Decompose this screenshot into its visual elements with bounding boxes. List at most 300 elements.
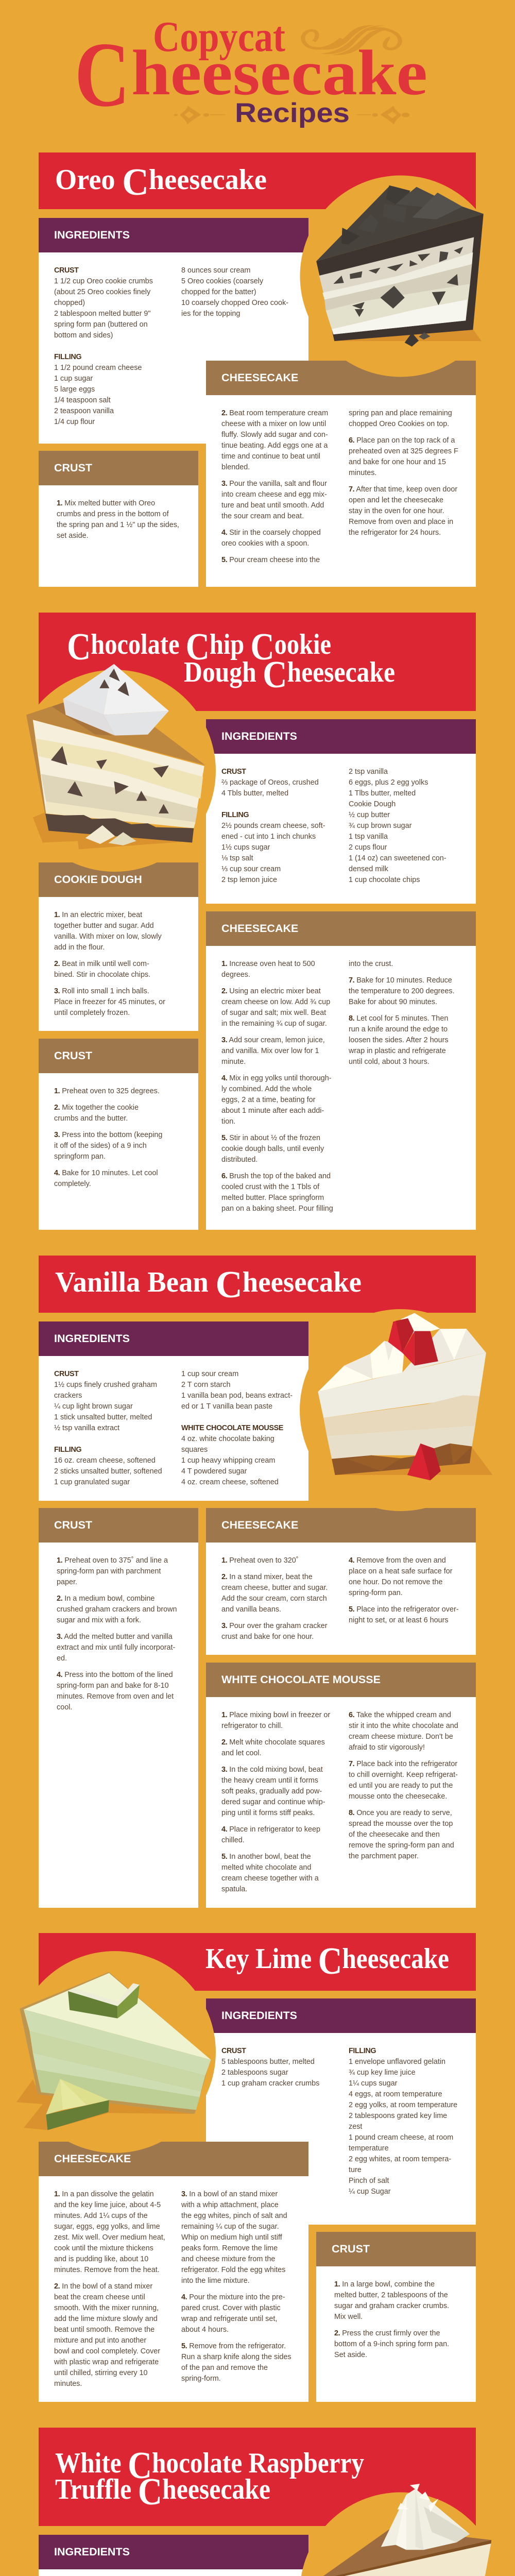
heading: INGREDIENTS (221, 2009, 297, 2022)
steps column 1: of sugar and salt; mix well. Beat (221, 1009, 326, 1017)
steps column 2 (349, 1555, 459, 1626)
steps column 2: Bake for about 90 minutes. (349, 998, 437, 1006)
ornament: right flourish (356, 106, 409, 125)
ingredients column 1: 2 teaspoon vanilla (54, 407, 114, 415)
ingredients column 2: ¼ cup Sugar (349, 2188, 391, 2196)
banner: White Chocolate Raspberry Truffle Cheesecake: Truffle (55, 2473, 141, 2505)
panel: ingredients (206, 719, 476, 904)
ingredients column 2: densed milk (349, 865, 388, 873)
steps column 1: into cream cheese and egg mix- (221, 490, 327, 499)
steps column 2: 6. Take the whipped cream and (349, 1711, 451, 1719)
cake slice (26, 664, 205, 849)
steps column 1: add the lime mixture slowly and (54, 2315, 158, 2323)
ingredients column 2: 4 T powdered sugar (181, 1467, 247, 1476)
ingredients column 1 (54, 1368, 162, 1488)
steps column 2: 3. In a bowl of an stand mixer (181, 2190, 278, 2198)
panel: crust (39, 1508, 198, 1908)
steps column 2 (349, 1710, 458, 1862)
ingredients column 1: FILLING (54, 1446, 81, 1454)
section: Key Lime Cheesecake (0, 1933, 515, 2402)
steps: crumbs and the butter. (54, 1114, 128, 1122)
steps column 1: time and continue to beat until (221, 452, 320, 461)
steps column 1: Add the sour cream, corn starch (221, 1595, 327, 1603)
illustration: oreo cheesecake slice (300, 176, 501, 378)
banner: Vanilla Bean Cheesecake (39, 1256, 476, 1313)
ingredients column 1: 2 tablespoon melted butter 9" (54, 310, 151, 318)
ingredients column 1: 1 cup graham cracker crumbs (221, 2079, 319, 2088)
steps column 2: wrap and refrigerate until set, (181, 2315, 277, 2323)
ingredients column 1: 1½ cups sugar (221, 843, 270, 852)
steps column 1: sugar, eggs, egg yolks, and lime (54, 2223, 160, 2231)
ingredients column 2: 1 vanilla bean pod, beans extract- (181, 1391, 293, 1399)
heading (206, 1663, 476, 1697)
backdrop circle (14, 670, 216, 872)
steps column 1: 4. Stir in the coarsely chopped (221, 529, 321, 537)
steps column 1 (221, 1710, 330, 1895)
heading: CRUST (54, 1519, 92, 1531)
steps column 1 (221, 408, 328, 566)
banner: Chocolate Chip Cookie Dough Cheesecake: C (263, 654, 287, 696)
cake slice (16, 1972, 211, 2130)
steps: 2. Beat in milk until well com- (54, 960, 149, 968)
steps column 2: loosen the sides. After 2 hours (349, 1036, 449, 1044)
steps column 1: 2. In a stand mixer, beat the (221, 1573, 313, 1581)
heading: Copycat: Copycat (153, 13, 285, 61)
steps: cool. (57, 1703, 72, 1711)
heading: Cheesecake: heesecake (131, 38, 427, 109)
ingredients column 2: temperature (349, 2144, 389, 2153)
steps column 2: of the pan and remove the (181, 2364, 268, 2372)
banner: Chocolate Chip Cookie Dough Cheesecake: C (186, 626, 210, 668)
steps column 1: melted white chocolate and (221, 1863, 311, 1872)
steps: 3. Roll into small 1 inch balls. (54, 987, 149, 995)
ingredients column 1: 2 tablespoons sugar (221, 2069, 288, 2077)
steps: spring-form pan with parchment (57, 1567, 161, 1575)
banner: Chocolate Chip Cookie Dough Cheesecake: ookie (274, 629, 331, 660)
ingredients column 2: 1 cup chocolate chips (349, 876, 420, 884)
steps (54, 1086, 162, 1189)
ingredients column 1 (54, 265, 153, 428)
steps column 1: chilled. (221, 1836, 245, 1844)
steps: it off of the sides) of a 9 inch (54, 1142, 147, 1150)
backdrop circle (300, 1309, 502, 1511)
section: White Chocolate Raspberry Truffle Cheesecake (0, 2428, 515, 2576)
heading: CHEESECAKE (221, 922, 298, 935)
steps column 1: cream cheese on low. Add ¾ cup (221, 998, 330, 1006)
panel: crust (39, 451, 198, 587)
heading (206, 361, 476, 395)
steps column 2: spring pan and place remaining (349, 409, 452, 417)
ingredients column 1: CRUST (221, 2047, 246, 2055)
steps column 2: open and let the cheesecake (349, 496, 443, 504)
steps (57, 1555, 177, 1713)
steps column 1: 1. Increase oven heat to 500 (221, 960, 315, 968)
banner: White Chocolate Raspberry Truffle Cheesecake: White (55, 2447, 130, 2479)
steps column 1: 2. Beat room temperature cream (221, 409, 328, 417)
ingredients column 2: Cookie Dough (349, 800, 396, 808)
ingredients column 1: 2 tsp lemon juice (221, 876, 277, 884)
steps: 1. Mix melted butter with Oreo (57, 499, 155, 507)
ingredients column 2 (181, 1368, 293, 1488)
ingredients column 1 (221, 2046, 319, 2089)
panel: cheesecake (206, 1508, 476, 1655)
steps: minutes. Remove from oven and let (57, 1692, 174, 1701)
heading: Cheesecake: C (75, 23, 130, 126)
steps: extract and mix until fully incorporat- (57, 1643, 175, 1652)
steps column 2: one hour. Do not remove the (349, 1578, 442, 1586)
ingredients column 1: 1 cup sugar (54, 375, 93, 383)
steps column 2: until cold, about 3 hours. (349, 1058, 430, 1066)
steps: bined. Stir in chocolate chips. (54, 971, 150, 979)
steps: the spring pan and 1 ½" up the sides, (57, 521, 179, 529)
steps column 2: to chill overnight. Keep refrigerat- (349, 1771, 458, 1779)
banner: Vanilla Bean Cheesecake: Vanilla Bean (55, 1266, 212, 1298)
steps column 1: 4. Place in refrigerator to keep (221, 1825, 320, 1834)
ornament: left flourish (174, 106, 225, 125)
steps: crushed graham crackers and brown (57, 1605, 177, 1614)
ingredients column 2: 6 eggs, plus 2 egg yolks (349, 778, 428, 787)
steps column 1: eggs, 2 at a time, beating for (221, 1096, 315, 1104)
steps column 1: 5. Stir in about ½ of the frozen (221, 1134, 320, 1142)
steps column 1: 3. Pour over the graham cracker (221, 1622, 328, 1630)
steps column 1: smooth. With the mixer running, (54, 2304, 159, 2312)
banner: Oreo Cheesecake: heesecake (149, 164, 267, 196)
banner: White Chocolate Raspberry Truffle Cheesecake: heesecake (162, 2473, 270, 2505)
panel: ingredients (39, 218, 308, 444)
steps: 1. Preheat oven to 375˚ and line a (57, 1556, 168, 1565)
ingredients column 2: 4 eggs, at room temperature (349, 2090, 442, 2098)
steps column 1: cookie dough balls, until evenly (221, 1145, 324, 1153)
banner: Chocolate Chip Cookie Dough Cheesecake: Dough (184, 656, 266, 688)
steps (57, 498, 179, 541)
banner: Chocolate Chip Cookie Dough Cheesecake: C (67, 626, 91, 668)
heading (39, 1039, 198, 1073)
heading (39, 2535, 308, 2569)
banner: Chocolate Chip Cookie Dough Cheesecake: hocolate (91, 629, 186, 660)
steps: spring-form pan and bake for 8-10 (57, 1682, 169, 1690)
steps column 1 (221, 959, 333, 1214)
heading: CRUST (332, 2243, 370, 2255)
panel: cheesecake (206, 911, 476, 1230)
steps column 1: 2. Using an electric mixer beat (221, 987, 321, 995)
ingredients column 1: 1 1/2 pound cream cheese (54, 364, 142, 372)
panel: cheesecake (39, 2142, 308, 2402)
steps: 1. In an electric mixer, beat (54, 911, 142, 919)
steps column 2: preheated oven at 325 degrees F (349, 447, 458, 455)
steps column 2: remaining ¼ cup of the sugar. (181, 2223, 279, 2231)
steps column 2: the refrigerator for 24 hours. (349, 529, 441, 537)
steps column 1: 5. In another bowl, beat the (221, 1853, 311, 1861)
ingredients column 1: ⅔ package of Oreos, crushed (221, 778, 319, 787)
heading: CRUST (54, 462, 92, 474)
ingredients column 1: 16 oz. cream cheese, softened (54, 1456, 156, 1464)
heading (206, 911, 476, 946)
steps column 2: refrigerator. Fold the egg whites (181, 2266, 285, 2274)
section: Oreo Cheesecake (39, 152, 484, 587)
ingredients column 1: 1 stick unsalted butter, melted (54, 1413, 152, 1421)
steps column 2: 7. Bake for 10 minutes. Reduce (349, 976, 452, 985)
ingredients column 2: 1 (14 oz) can sweetened con- (349, 854, 447, 862)
steps column 2: with a whip attachment, place (181, 2201, 279, 2209)
ingredients column 2: 2 egg yolks, at room temperature (349, 2101, 457, 2109)
steps column 1: 6. Brush the top of the baked and (221, 1172, 331, 1180)
ingredients column 2: 1¼ cups sugar (349, 2079, 397, 2088)
steps: 3. Press into the bottom (keeping (54, 1130, 162, 1139)
steps column 1: cream cheese together with a (221, 1874, 319, 1883)
ingredients column 2: FILLING (349, 2047, 376, 2055)
steps: together butter and sugar. Add (54, 922, 154, 930)
ingredients column 2: 2 tsp vanilla (349, 768, 388, 776)
steps column 1: and is pudding like, about 10 (54, 2255, 148, 2263)
ornament: swirl (303, 25, 400, 55)
banner: Key Lime Cheesecake (39, 1933, 476, 1991)
ingredients column 2: ed or 1 T vanilla bean paste (181, 1402, 272, 1411)
steps column 2: and cheese mixture from the (181, 2255, 275, 2263)
steps: completely. (54, 1180, 91, 1188)
heading: CHEESECAKE (221, 1519, 298, 1531)
steps: 3. Add the melted butter and vanilla (57, 1633, 173, 1641)
ingredients column 1: ⅛ tsp salt (221, 854, 253, 862)
steps column 1: cheese with a mixer on low until (221, 420, 326, 428)
ingredients column 1: crackers (54, 1391, 82, 1399)
steps column 2: Remove from oven and place in (349, 518, 453, 526)
heading (39, 2142, 308, 2176)
steps column 2: the parchment paper. (349, 1852, 419, 1860)
ingredients column 2: Pinch of salt (349, 2177, 389, 2185)
banner: Chocolate Chip Cookie Dough Cheesecake: C (250, 626, 274, 668)
steps column 1: degrees. (221, 971, 250, 979)
steps: springform pan. (54, 1152, 106, 1160)
steps column 1: 1. In a pan dissolve the gelatin (54, 2190, 154, 2198)
heading: CRUST (54, 1049, 92, 1061)
steps column 2: 6. Place pan on the top rack of a (349, 436, 455, 445)
ingredients column 1: 4 Tbls butter, melted (221, 789, 288, 798)
steps column 2: spring-form. (181, 2375, 221, 2383)
steps column 2: 8. Let cool for 5 minutes. Then (349, 1014, 448, 1023)
heading: INGREDIENTS (54, 1332, 130, 1345)
steps column 2: Whip on medium high until stiff (181, 2233, 282, 2242)
steps: sugar and mix with a fork. (57, 1616, 141, 1624)
steps column 2: the temperature to 200 degrees. (349, 987, 455, 995)
ingredients column 1: CRUST (221, 768, 246, 776)
steps (334, 2279, 449, 2361)
steps column 1: minutes. Remove from the heat. (54, 2266, 160, 2274)
steps column 2 (181, 2189, 291, 2384)
steps column 1: cooled crust with the 1 Tbls of (221, 1183, 319, 1191)
banner: Key Lime Cheesecake: C (318, 1940, 342, 1982)
steps: paper. (57, 1578, 77, 1586)
panel: ingredients (39, 1321, 308, 1501)
steps column 2: afraid to stir vigorously! (349, 1743, 425, 1752)
banner: White Chocolate Raspberry Truffle Cheesecake: C (128, 2445, 152, 2487)
ingredients column 2: chopped for the batter) (181, 288, 256, 296)
ingredients column 2: 5 Oreo cookies (coarsely (181, 277, 263, 285)
ingredients column 2: ¾ cup key lime juice (349, 2069, 416, 2077)
steps column 1: 4. Mix in egg yolks until thorough- (221, 1074, 332, 1082)
backdrop circle (300, 175, 502, 377)
steps: vanilla. With mixer on low, slowly (54, 933, 162, 941)
panel: ingredients (39, 2535, 308, 2576)
ingredients column 1: FILLING (221, 811, 249, 819)
heading (39, 451, 198, 485)
steps column 1: 1. Place mixing bowl in freezer or (221, 1711, 330, 1719)
steps: 4. Bake for 10 minutes. Let cool (54, 1168, 158, 1177)
title (75, 13, 427, 128)
cake slice (318, 2484, 491, 2576)
heading (206, 1508, 476, 1543)
ingredients column 2: 1 tsp vanilla (349, 833, 388, 841)
panel: white chocolate mousse (206, 1663, 476, 1908)
steps column 1: crust and bake for one hour. (221, 1633, 314, 1641)
steps column 1: tinue beating. Add eggs one at a (221, 442, 328, 450)
section: Vanilla Bean Cheesecake (0, 1256, 515, 1908)
ingredients column 1: 2½ pounds cream cheese, soft- (221, 822, 325, 830)
steps column 2: chopped Oreo Cookies on top. (349, 420, 449, 428)
steps column 1: beat until smooth. Remove the (54, 2326, 154, 2334)
banner: White Chocolate Raspberry Truffle Cheesecake (39, 2428, 476, 2526)
steps column 1: about 1 minute after each addi- (221, 1107, 324, 1115)
steps column 1 (221, 1555, 328, 1642)
steps column 2: minutes. (349, 469, 376, 477)
illustration: key lime cheesecake slice (14, 1951, 216, 2153)
steps: 2. In a medium bowl, combine (57, 1595, 154, 1603)
steps column 2: 8. Once you are ready to serve, (349, 1809, 452, 1817)
banner: Oreo Cheesecake: C (122, 161, 149, 204)
panel: ingredients (206, 1998, 476, 2225)
ingredients column 1: CRUST (54, 266, 79, 275)
steps: until completely frozen. (54, 1009, 130, 1017)
steps column 2: 4. Remove from the oven and (349, 1556, 446, 1565)
banner: Vanilla Bean Cheesecake: heesecake (243, 1266, 362, 1298)
panel: crust (316, 2232, 476, 2402)
banner: Key Lime Cheesecake: heesecake (342, 1943, 449, 1975)
steps: ed. (57, 1654, 67, 1663)
ingredients column 2: ¾ cup brown sugar (349, 822, 411, 830)
steps column 2: remove the spring-form pan and (349, 1841, 454, 1850)
backdrop circle (14, 1951, 216, 2153)
backdrop circle (300, 2493, 502, 2576)
steps column 1: minutes. Add 1¼ cups of the (54, 2212, 148, 2220)
ingredients column 2: 1 cup sour cream (181, 1369, 238, 1378)
ingredients column 1: 1 cup granulated sugar (54, 1478, 130, 1486)
ingredients column 2 (349, 767, 447, 886)
steps column 2: into the lime mixture. (181, 2277, 250, 2285)
ingredients column 2: ies for the topping (181, 310, 240, 318)
steps column 2: cream cheese mixture. Don't be (349, 1733, 453, 1741)
steps column 2: 7. Place back into the refrigerator (349, 1760, 457, 1768)
steps column 2: wrap in plastic and refrigerate (349, 1047, 446, 1055)
steps: melted butter, 2 tablespoons of the (334, 2291, 448, 2299)
heading: COOKIE DOUGH (54, 873, 142, 886)
ingredients column 1: ened - cut into 1 inch chunks (221, 833, 316, 841)
ingredients column 2: squares (181, 1446, 208, 1454)
steps column 1: oreo cookies with a spoon. (221, 539, 309, 548)
steps: 2. Press the crust firmly over the (334, 2329, 440, 2337)
section: Chocolate Chip Cookie Dough Cheesecake (0, 613, 515, 1230)
ingredients column 2: 1 Tlbs butter, melted (349, 789, 416, 798)
heading (39, 1321, 308, 1356)
steps column 1: mixture and put into another (54, 2336, 146, 2345)
banner: White Chocolate Raspberry Truffle Cheesecake: hocolate Raspberry (152, 2447, 364, 2479)
steps column 1: blended. (221, 463, 250, 471)
steps: sugar and graham cracker crumbs. (334, 2302, 449, 2310)
ingredients column 2: ture (349, 2166, 362, 2174)
heading (39, 218, 308, 252)
ingredients column 1: 2 sticks unsalted butter, softened (54, 1467, 162, 1476)
heading: INGREDIENTS (54, 2546, 130, 2558)
ingredients column 1: (about 25 Oreo cookies finely (54, 288, 150, 296)
steps column 1: ture and beat until smooth. Add (221, 501, 324, 510)
ingredients column 2: 4 oz. cream cheese, softened (181, 1478, 279, 1486)
heading: INGREDIENTS (221, 730, 297, 742)
ingredients column 1: 5 tablespoons butter, melted (221, 2058, 315, 2066)
steps: Place in freezer for 45 minutes, or (54, 998, 165, 1006)
ingredients column 1: 1/4 cup flour (54, 418, 95, 426)
heading: Recipes: Recipes (235, 98, 350, 128)
steps column 1: in the remaining ¾ cup of sugar. (221, 1020, 327, 1028)
steps column 2: 7. After that time, keep oven door (349, 485, 457, 494)
steps column 2: 5. Place into the refrigerator over- (349, 1605, 459, 1614)
steps column 2: mousse onto the cheesecake. (349, 1792, 447, 1801)
banner: Chocolate Chip Cookie Dough Cheesecake (39, 613, 476, 711)
ingredients column 1: 1 1/2 cup Oreo cookie crumbs (54, 277, 153, 285)
steps column 1: 1. Preheat oven to 320˚ (221, 1556, 299, 1565)
banner: Oreo Cheesecake (39, 152, 476, 209)
banner: Vanilla Bean Cheesecake: C (216, 1264, 243, 1306)
steps column 1: refrigerator to chill. (221, 1722, 283, 1730)
ingredients column 1: spring form pan (buttered on (54, 320, 148, 329)
steps column 1: pan on a baking sheet. Pour filling (221, 1205, 333, 1213)
steps column 1: 2. Melt white chocolate squares (221, 1738, 325, 1747)
steps column 1: minutes. (54, 2380, 82, 2388)
ingredients column 2: 1 pound cream cheese, at room (349, 2133, 453, 2142)
steps: 4. Press into the bottom of the lined (57, 1671, 173, 1679)
ingredients column 1: bottom and sides) (54, 331, 113, 340)
ingredients column 2: 2 T corn starch (181, 1381, 230, 1389)
heading: CHEESECAKE (54, 2153, 131, 2165)
illustration: chocolate chip cheesecake slice (14, 670, 216, 872)
heading (39, 862, 198, 897)
steps column 1: melted butter. Place springform (221, 1194, 324, 1202)
steps column 1: until chilled, stirring every 10 (54, 2369, 148, 2377)
banner: Chocolate Chip Cookie Dough Cheesecake: heesecake (287, 656, 395, 688)
ingredients column 1: 1/4 teaspoon salt (54, 396, 111, 404)
illustration: vanilla bean cheesecake slice (300, 1309, 502, 1511)
steps column 1: and the key lime juice, about 4-5 (54, 2201, 161, 2209)
steps column 2: and bake for one hour and 15 (349, 458, 446, 466)
steps column 1: tion. (221, 1117, 235, 1126)
steps column 2: spring-form pan. (349, 1589, 403, 1597)
banner: White Chocolate Raspberry Truffle Cheesecake: C (138, 2471, 162, 2513)
ingredients column 1: ⅓ cup sour cream (221, 865, 281, 873)
heading: CHEESECAKE (221, 371, 298, 384)
banner: Key Lime Cheesecake: Key Lime (205, 1943, 327, 1975)
heading (39, 1508, 198, 1543)
panel: cheesecake (206, 361, 476, 587)
ingredients column 2: zest (349, 2123, 362, 2131)
ingredients column 2: 1 envelope unflavored gelatin (349, 2058, 445, 2066)
steps: 2. Mix together the cookie (54, 1104, 139, 1112)
cake slice (318, 1313, 493, 1480)
ingredients column 1: ¼ cup light brown sugar (54, 1402, 133, 1411)
steps column 1: cook until the mixture thickens (54, 2244, 153, 2252)
steps column 2: into the crust. (349, 960, 393, 968)
steps column 2: about 4 hours. (181, 2326, 229, 2334)
steps column 2: stay in the oven for one hour. (349, 507, 444, 515)
ingredients column 2: 2 egg whites, at room tempera- (349, 2155, 451, 2163)
steps column 1: 3. Add sour cream, lemon juice, (221, 1036, 325, 1044)
steps column 2 (349, 959, 455, 1067)
